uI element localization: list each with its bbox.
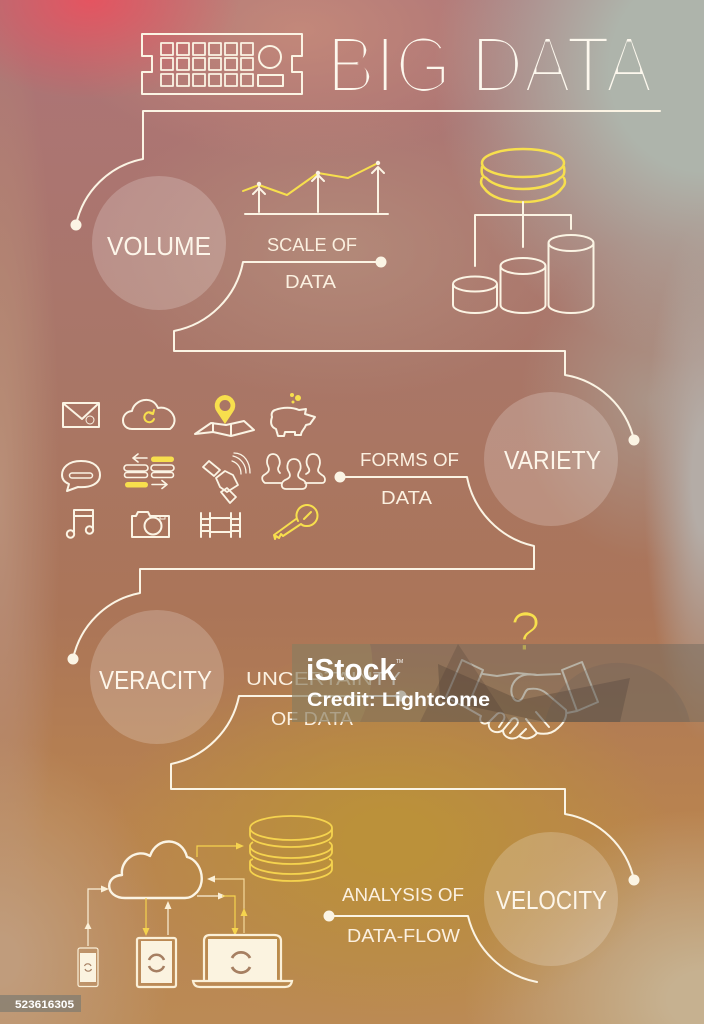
analysis connector — [324, 910, 537, 982]
icon: camera — [132, 512, 169, 537]
icon grid: data forms — [62, 393, 325, 539]
icon: music note — [67, 510, 93, 538]
volume label: VOLUME — [107, 231, 211, 261]
panel: volume — [92, 149, 594, 313]
icon: phone — [78, 948, 98, 986]
watermark text: iStock — [306, 652, 397, 687]
icon: satellite — [203, 453, 250, 503]
velocity circle — [484, 832, 618, 966]
connector: veracity to velocity — [171, 690, 640, 886]
icon: people — [262, 454, 325, 489]
analysis of data-flow text: ANALYSIS OF — [342, 884, 464, 905]
veracity label: VERACITY — [99, 665, 212, 695]
icon: handshake — [446, 600, 598, 738]
scale of data text: SCALE OF — [267, 234, 357, 255]
variety label: VARIETY — [504, 445, 601, 475]
icon: tablet — [137, 938, 176, 987]
volume circle — [92, 176, 226, 310]
analysis of data-flow text — [342, 884, 464, 946]
scale of data text — [267, 234, 357, 292]
icon: speech bubble — [62, 461, 100, 491]
analysis of data-flow text: DATA-FLOW — [347, 925, 461, 946]
diagram: cloud data flow — [78, 816, 332, 987]
veracity circle — [90, 610, 224, 744]
watermark band: Credit: Lightcome — [307, 689, 490, 711]
icon: film strip — [201, 513, 240, 537]
panel: variety — [62, 392, 618, 539]
stock id label — [0, 995, 81, 1012]
icon: memory chip — [142, 34, 302, 94]
arrows — [84, 842, 248, 946]
icon: data lists — [124, 454, 174, 488]
forms of data text — [360, 449, 459, 508]
uncertainty of data text: UNCERTAINTY — [246, 668, 401, 689]
icon: yellow database — [250, 816, 332, 881]
scale of data text: DATA — [285, 271, 337, 292]
connector: volume to variety — [174, 256, 640, 446]
connector: header to volume — [70, 111, 660, 230]
variety circle — [484, 392, 618, 526]
forms of data text: FORMS OF — [360, 449, 459, 470]
panel: velocity — [78, 816, 618, 987]
icon: laptop — [193, 935, 292, 987]
line chart icon — [243, 161, 388, 214]
icon: cloud — [109, 841, 202, 898]
icon: database hierarchy — [453, 149, 594, 313]
velocity label: VELOCITY — [496, 885, 607, 915]
icon: email — [63, 403, 99, 427]
connector: variety to veracity — [68, 472, 534, 664]
icon: piggy bank — [271, 393, 315, 436]
icon: map pin — [195, 395, 254, 436]
icon: question mark: ? — [510, 600, 541, 662]
panel: veracity — [90, 600, 598, 744]
watermark band — [292, 644, 704, 722]
uncertainty of data text — [246, 668, 401, 729]
uncertainty of data text: OF DATA — [271, 708, 354, 729]
watermark band: TM — [396, 659, 403, 665]
stock id label: 523616305 — [15, 999, 74, 1011]
title: BIG DATA — [327, 20, 654, 109]
icon: key — [274, 505, 317, 539]
icon: cloud — [123, 400, 175, 429]
forms of data text: DATA — [381, 487, 433, 508]
